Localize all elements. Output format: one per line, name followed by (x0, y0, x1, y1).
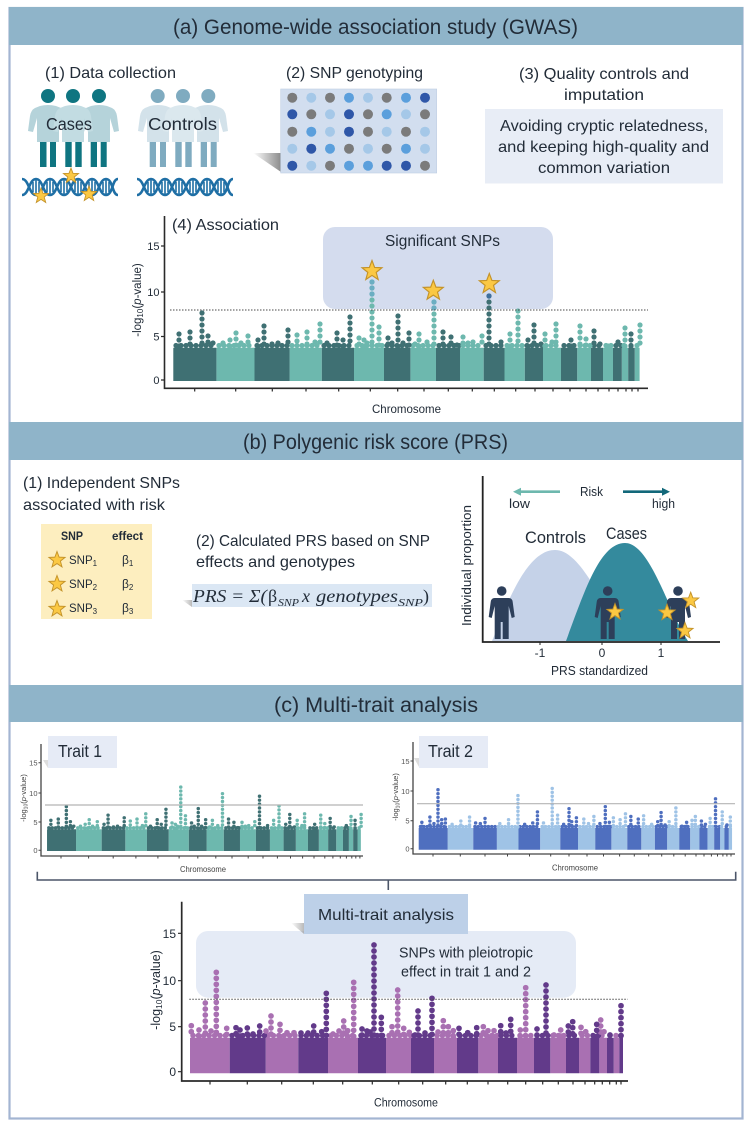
heading: panel b: (b) Polygenic risk score (PRS) (243, 431, 508, 454)
table: SNP effects: 1 (93, 559, 98, 568)
arrow: high risk (623, 488, 670, 496)
chart: trait 2 Manhattan plot: 10 (395, 803, 401, 808)
chart: combined multi-trait Manhattan plot: 10 (154, 999, 164, 1009)
chart: trait 1 Manhattan plot: 0 (33, 846, 38, 855)
chart: trait 2 Manhattan plot: ( (391, 800, 400, 803)
icon: DNA with stars (22, 168, 118, 202)
table: SNP effects: 3 (93, 607, 98, 616)
chart: trait 1 Manhattan plot: -log (19, 809, 28, 822)
step 2: SNP genotyping (253, 65, 437, 173)
label: multi-trait analysis (304, 894, 468, 934)
step 1: independent SNPs (23, 475, 180, 514)
chart: trait 2 Manhattan plot: Chromosome (552, 864, 598, 873)
step 2: PRS formula: ) (423, 586, 429, 607)
chart: PRS distribution: Risk (580, 485, 604, 499)
chart: combined multi-trait Manhattan plot: 5 (169, 1020, 176, 1034)
table: SNP effects: 1 (129, 559, 134, 568)
chart: combined multi-trait Manhattan plot: 0 (169, 1065, 176, 1079)
chart: trait 1 Manhattan plot: 10 (23, 804, 29, 809)
chart: trait 2 Manhattan plot: 0 (405, 844, 410, 854)
table: SNP effects: SNP (69, 579, 93, 591)
panel: (a) GWAS (9, 7, 743, 416)
step 2: PRS formula: (2) Calculated PRS based on SNP (196, 533, 430, 550)
label: trait 1: Trait 1 (58, 741, 102, 761)
icon: person one star (595, 586, 621, 639)
heading: panel a: (a) Genome-wide association study (GWAS) (173, 16, 578, 39)
chart: PRS distribution (459, 476, 720, 678)
heading: panel b (9, 422, 743, 460)
label: trait 2 (419, 736, 488, 768)
heading: panel c (9, 685, 743, 722)
table: SNP effects: 2 (93, 583, 98, 592)
step 2: SNP genotyping: (2) SNP genotyping (286, 65, 423, 82)
chart: PRS distribution: 1 (658, 646, 665, 660)
chart: combined multi-trait Manhattan plot: Chromosome (374, 1098, 438, 1110)
panel: (b) PRS (9, 422, 743, 678)
step 4: association Manhattan plot: 10 (136, 308, 145, 318)
icon: person high risk (665, 586, 691, 639)
icon: controls group: Controls (148, 114, 217, 134)
step 4: association Manhattan plot: Chromosome (372, 402, 441, 416)
step 4: association Manhattan plot: 10 (147, 287, 160, 299)
step 2: PRS formula (182, 533, 432, 609)
chart: PRS distribution: PRS standardized (551, 664, 648, 678)
chart: combined multi-trait Manhattan plot: 10 (163, 974, 176, 988)
arrow: low risk (513, 488, 560, 496)
chart: trait 2 Manhattan plot: p-value) (391, 773, 400, 800)
chart: combined multi-trait Manhattan plot: ( (149, 995, 163, 1000)
step 1: data collection (22, 65, 233, 202)
chart: PRS distribution: Cases (606, 525, 647, 543)
chart: PRS distribution: Controls (525, 529, 586, 547)
step 4: association Manhattan plot: p-value) (132, 263, 144, 305)
chart: combined multi-trait Manhattan plot: SNPs with pleiotropic (399, 946, 533, 962)
chart: combined multi-trait Manhattan plot: 15 (163, 927, 176, 941)
step 1: data collection: (1) Data collection (45, 65, 176, 82)
label: trait 1 (48, 736, 117, 768)
step 4: association Manhattan plot: Significant SNPs (385, 233, 500, 250)
chart: trait 2 Manhattan plot (391, 736, 735, 873)
step 2: PRS formula: SNP (278, 598, 300, 609)
chart: trait 1 Manhattan plot (19, 736, 363, 874)
panel: (c) multi-trait analysis (9, 685, 743, 1110)
chart: trait 1 Manhattan plot: p-value) (19, 774, 28, 801)
table: SNP effects: SNP (61, 531, 83, 543)
chart: trait 1 Manhattan plot: 10 (29, 789, 38, 798)
step 2: PRS formula: SNP (398, 598, 424, 609)
chart: PRS distribution: -1 (535, 646, 546, 660)
icon: significant SNP stars (362, 260, 499, 299)
step 2: PRS formula: β (268, 586, 277, 606)
chart: trait 1 Manhattan plot: 15 (29, 758, 38, 768)
step 4: association Manhattan plot: -log (132, 318, 144, 337)
chart: trait 1 Manhattan plot: ( (19, 801, 28, 804)
step 2: PRS formula: effects and genotypes (196, 554, 355, 571)
step 4: association Manhattan plot: (4) Association (172, 217, 279, 234)
icon: controls group (138, 89, 228, 167)
step 4: association Manhattan plot: 15 (147, 241, 160, 253)
step 4: association Manhattan plot: 5 (153, 332, 160, 344)
table: SNP effects: effect (112, 531, 143, 543)
step 3: quality controls: imputation (564, 87, 644, 104)
table: SNP effects: β (122, 601, 129, 615)
label: trait 2: Trait 2 (428, 741, 473, 761)
chart: trait 2 Manhattan plot: -log (391, 808, 400, 821)
table: SNP effects: 2 (129, 583, 134, 592)
chart: trait 1 Manhattan plot: Chromosome (180, 865, 226, 874)
step 4: association Manhattan plot: 0 (153, 375, 160, 387)
step 4: association Manhattan plot (132, 216, 648, 416)
chart: combined multi-trait Manhattan plot: effect in trait 1 and 2 (401, 965, 531, 981)
icon: cases group: Cases (46, 114, 92, 134)
table: SNP effects: SNP (69, 555, 93, 567)
table: SNP effects: 3 (129, 607, 134, 616)
chart: PRS distribution: low (509, 497, 531, 511)
step 3: quality controls: common variation (538, 160, 670, 177)
chart: PRS distribution: 0 (599, 646, 606, 660)
icon: person low risk (489, 586, 515, 639)
step 2: PRS formula: x (301, 586, 310, 606)
step 4: association Manhattan plot: ( (132, 305, 144, 309)
chart: trait 2 Manhattan plot: 10 (401, 787, 410, 796)
chart: combined multi-trait Manhattan plot (149, 894, 628, 1110)
chart: trait 2 Manhattan plot: 15 (401, 757, 410, 766)
icon: risk stars (607, 592, 699, 638)
table: SNP effects (41, 524, 152, 619)
table: SNP effects: β (122, 553, 129, 567)
table: SNP effects: β (122, 577, 129, 591)
chart: trait 1 Manhattan plot: 5 (33, 818, 38, 827)
step 2: PRS formula: genotypes (316, 586, 398, 606)
step 3: quality controls: (3) Quality controls and (519, 66, 689, 83)
step 2: PRS formula: PRS = Σ( (192, 586, 268, 607)
chart: combined multi-trait Manhattan plot: -log (149, 1009, 163, 1030)
step 1: independent SNPs: (1) Independent SNPs (23, 475, 180, 492)
icon: cases group (28, 89, 119, 167)
step 3: quality controls: Avoiding cryptic relatedness, (500, 118, 708, 135)
icon: DNA controls (137, 179, 233, 195)
heading: panel a (9, 7, 743, 45)
chart: PRS distribution: Individual proportion (459, 505, 474, 626)
chart: combined multi-trait Manhattan plot: p-value) (149, 950, 163, 995)
chart: trait 2 Manhattan plot: 5 (405, 816, 410, 826)
step 3: quality controls (485, 66, 723, 184)
step 3: quality controls: and keeping high-quality and (498, 139, 709, 156)
label: multi-trait analysis: Multi-trait analysis (318, 907, 454, 924)
SNP genotype plate (281, 89, 437, 173)
step 1: independent SNPs: associated with risk (23, 497, 166, 514)
heading: panel c: (c) Multi-trait analysis (274, 694, 478, 717)
table: SNP effects: SNP (69, 603, 93, 615)
chart: PRS distribution: high (652, 497, 675, 511)
